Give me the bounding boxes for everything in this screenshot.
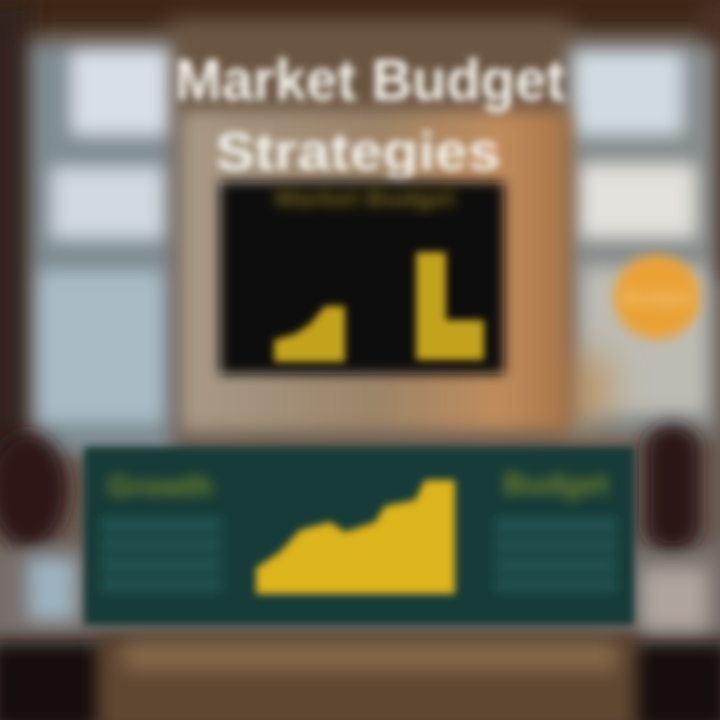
side figures xyxy=(0,425,708,630)
left window xyxy=(32,45,172,455)
warm glow on frame xyxy=(560,350,610,430)
right window xyxy=(568,45,716,435)
orange badge xyxy=(614,255,700,339)
title: Market Budget xyxy=(175,48,565,113)
small bar chart xyxy=(274,306,345,362)
growth bar chart xyxy=(256,480,455,594)
chart screen xyxy=(220,182,504,374)
large bar chart xyxy=(416,252,484,360)
orange badge: Budget xyxy=(623,287,692,309)
title xyxy=(175,48,565,182)
title: Strategies xyxy=(216,122,500,182)
screen heading: Market Budget xyxy=(275,186,456,211)
left heading: Growth xyxy=(108,470,212,503)
green panel xyxy=(84,447,634,625)
couch xyxy=(97,634,637,720)
left text block xyxy=(100,518,222,591)
monitor frame xyxy=(180,110,570,432)
right text block xyxy=(495,518,617,591)
right heading: Budget xyxy=(504,468,608,501)
